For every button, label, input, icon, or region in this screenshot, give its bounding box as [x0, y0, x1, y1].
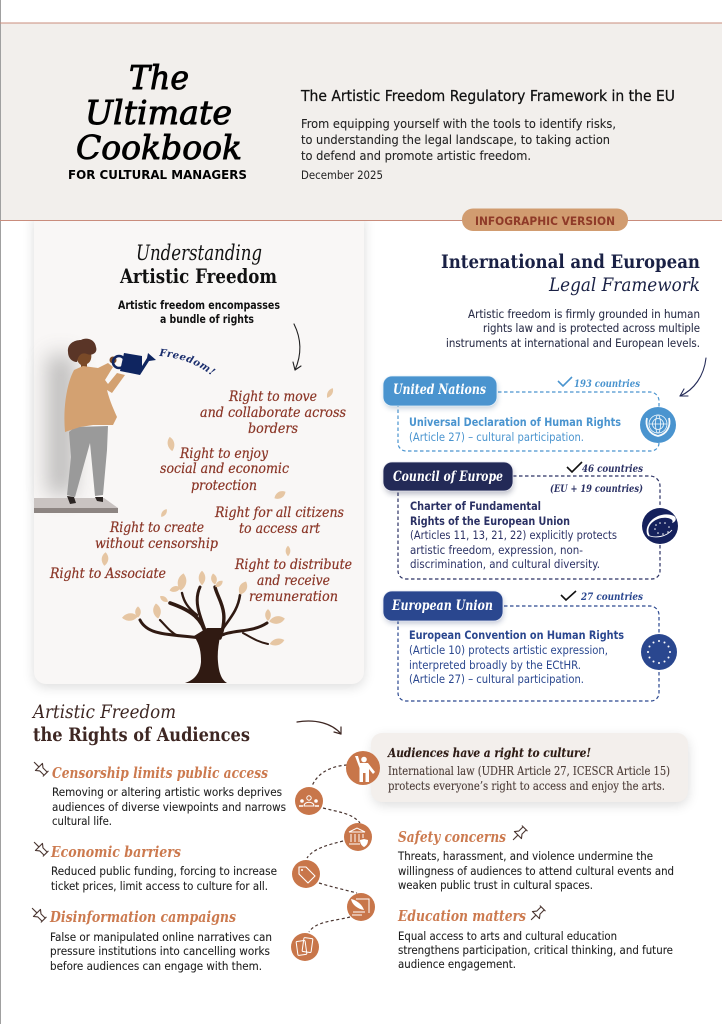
pin icon [31, 759, 49, 777]
right to move: borders [248, 421, 298, 437]
check [558, 377, 572, 386]
description: artistic freedom, expression, non- [410, 543, 583, 557]
dashed frame [398, 476, 660, 579]
item body: willingness of audiences to attend cultural events and [398, 864, 674, 878]
country count: 27 countries [580, 591, 643, 603]
pin icon [510, 825, 528, 843]
pill [383, 591, 503, 621]
description: Universal Declaration of Human Rights [409, 415, 621, 429]
item body: Reduced public funding, forcing to increase [51, 864, 277, 878]
pill label: European Union [391, 598, 493, 614]
icon: eu emblem [641, 634, 677, 670]
right to enjoy: protection [191, 478, 257, 494]
panel: european union [383, 591, 677, 701]
pill label: Council of Europe [393, 469, 503, 485]
pill shadow [385, 380, 497, 408]
pill shadow [385, 466, 513, 494]
country count [550, 463, 643, 495]
right to move [200, 389, 346, 437]
subtitle: FOR CULTURAL MANAGERS [68, 167, 247, 182]
description: (Article 27) – cultural participation. [409, 672, 584, 686]
dashed frame [398, 606, 659, 701]
pill [383, 376, 497, 406]
callout heading: Audiences have a right to culture! [387, 745, 591, 760]
item body: strengthens participation, critical thinking, and future [398, 943, 673, 957]
card heading [119, 241, 277, 288]
left page edge [0, 0, 1, 1024]
title: The [129, 58, 189, 97]
check [561, 591, 576, 600]
dashed frame [398, 392, 659, 451]
item body: Removing or altering artistic works deprives [52, 785, 282, 799]
item: economic barriers [31, 839, 277, 893]
right for all citizens: Right for all citizens [214, 505, 344, 521]
country count: 193 countries [574, 378, 640, 390]
description [410, 499, 617, 571]
item body: before audiences can engage with them. [50, 959, 262, 973]
item body: Equal access to arts and cultural education [398, 929, 617, 943]
card heading: Artistic Freedom [119, 264, 277, 288]
icon: price tag [292, 860, 320, 888]
description: discrimination, and cultural diversity. [410, 557, 600, 571]
icon: person with raised arm [346, 751, 380, 785]
illustration: tree with leaves [101, 387, 335, 683]
right to create: Right to create [109, 520, 204, 536]
description: to understanding the legal landscape, to taking action [301, 132, 610, 147]
card intro text: a bundle of rights [160, 312, 254, 326]
callout body: protects everyone’s right to access and enjoy the arts. [388, 779, 665, 793]
figure shadow [48, 355, 74, 495]
list of rights [49, 389, 352, 605]
item body [50, 930, 272, 973]
right for all citizens: to access art [239, 521, 320, 537]
item body [52, 785, 286, 828]
item heading: Censorship limits public access [52, 764, 268, 782]
card intro text: Artistic freedom encompasses [118, 298, 280, 312]
icon: cards [291, 933, 319, 961]
item body: pressure institutions into cancelling works [50, 944, 270, 958]
title [76, 58, 242, 167]
description: Charter of Fundamental [410, 499, 541, 513]
header rules [0, 22, 722, 221]
pill [383, 462, 513, 491]
item heading: Safety concerns [398, 828, 506, 846]
item body: Threats, harassment, and violence undermine the [397, 849, 653, 863]
badge: infographic version [462, 208, 628, 231]
neck and face [76, 352, 116, 369]
item body: cultural life. [52, 814, 112, 828]
right to associate: Right to Associate [49, 566, 166, 582]
legal framework heading: Legal Framework [548, 274, 700, 296]
right for all citizens [214, 505, 344, 537]
callout: audiences have a right to culture [371, 733, 688, 805]
trunk [185, 628, 227, 683]
icon: council of europe emblem [642, 508, 678, 544]
arrow: down to organisations [680, 358, 706, 396]
callout body [388, 764, 670, 793]
item heading: Disinformation campaigns [49, 908, 236, 926]
badge: infographic version: INFOGRAPHIC VERSION [475, 214, 615, 228]
check [567, 462, 582, 472]
right to distribute: remuneration [249, 589, 338, 605]
callout shadow [373, 737, 688, 805]
tree leaves [122, 571, 286, 647]
trousers [67, 426, 108, 497]
item body: audience engagement. [398, 957, 516, 971]
right to distribute [234, 557, 352, 605]
freedom label: Freedom! [158, 348, 216, 374]
header background [1, 23, 722, 220]
item body [51, 864, 277, 893]
icon: quill on canvas [347, 893, 375, 921]
description: (Article 10) protects artistic expression, [409, 643, 608, 657]
description: Rights of the European Union [410, 514, 570, 528]
legal framework intro [446, 307, 700, 350]
right to enjoy: Right to enjoy [179, 446, 269, 462]
item body [398, 929, 673, 971]
right to enjoy: social and economic [160, 461, 289, 477]
right to distribute: Right to distribute [234, 557, 352, 573]
item body: ticket prices, limit access to culture for all. [51, 879, 268, 893]
branches [140, 587, 268, 644]
country count: (EU + 19 countries) [550, 483, 643, 495]
header band [0, 22, 722, 231]
right to create: without censorship [95, 536, 218, 552]
panel: united nations [383, 376, 676, 451]
description [409, 415, 621, 444]
item heading: Education matters [397, 907, 526, 925]
item body: weaken public trust in cultural spaces. [398, 878, 593, 892]
item: disinformation campaigns [29, 905, 272, 973]
watering can [113, 353, 156, 375]
item: censorship limits public access [31, 759, 286, 828]
description: From equipping yourself with the tools to identify risks, [301, 116, 616, 131]
description: interpreted broadly by the ECtHR. [409, 658, 581, 672]
item body: audiences of diverse viewpoints and narrows [52, 800, 286, 814]
title: Cookbook [76, 128, 242, 167]
description [301, 116, 616, 163]
shoes [67, 496, 103, 504]
right to move: and collaborate across [200, 405, 346, 421]
country count: 46 countries [582, 463, 643, 475]
pin icon [528, 905, 546, 923]
panel: understanding artistic freedom [29, 221, 368, 691]
icon: un emblem [640, 407, 676, 443]
date: December 2025 [301, 168, 383, 182]
sweater [64, 363, 125, 432]
card intro text [118, 298, 280, 326]
description: to defend and promote artistic freedom. [301, 148, 531, 163]
dashed path connectors [307, 765, 360, 932]
item: education matters [397, 905, 673, 971]
callout body: International law (UDHR Article 27, ICESCR Article 15) [388, 764, 670, 778]
legal framework intro: rights law and is protected across multiple [483, 321, 700, 335]
icon: institution with shield [344, 823, 372, 851]
falling leaves [101, 387, 335, 566]
icon: audience group [295, 787, 323, 815]
item: safety concerns [397, 825, 674, 892]
item body [397, 849, 674, 892]
pin icon [31, 839, 49, 857]
pill label: United Nations [393, 382, 486, 398]
legal framework intro: Artistic freedom is firmly grounded in human [468, 307, 700, 321]
description: European Convention on Human Rights [409, 628, 624, 642]
audiences heading: the Rights of Audiences [33, 724, 250, 746]
platform [34, 498, 118, 513]
card shadow [34, 218, 364, 687]
right to enjoy [160, 446, 289, 494]
arrow: to callout [297, 721, 341, 734]
right to create [95, 520, 218, 552]
description [409, 628, 624, 686]
description: (Articles 11, 13, 21, 22) explicitly protects [410, 528, 617, 542]
panel: council of europe [383, 462, 678, 579]
item heading: Economic barriers [50, 843, 181, 861]
right to move: Right to move [228, 389, 317, 405]
pin icon [29, 905, 47, 923]
pill shadow [385, 595, 503, 623]
title: Ultimate [85, 93, 232, 132]
document title: The Artistic Freedom Regulatory Framework in the EU [300, 87, 675, 105]
arrow: down to rights [293, 324, 301, 370]
audiences heading: Artistic Freedom [31, 701, 176, 723]
hair [68, 339, 96, 362]
description: (Article 27) – cultural participation. [409, 430, 584, 444]
item body: False or manipulated online narratives can [50, 930, 272, 944]
card heading: Understanding [136, 241, 262, 265]
card surface [34, 215, 364, 684]
callout box [371, 733, 688, 802]
illustration: person watering [34, 338, 216, 513]
legal framework heading [441, 251, 700, 296]
audiences heading [31, 701, 250, 746]
right to distribute: and receive [257, 573, 330, 589]
